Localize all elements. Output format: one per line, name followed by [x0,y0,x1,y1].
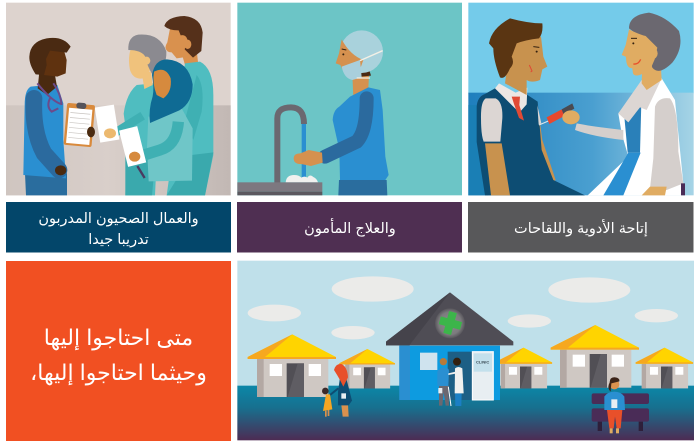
figure: woman on bench [592,377,649,433]
panel: village clinic scene [237,261,694,440]
figure: doctor with syringe [575,13,685,195]
icon: doctor hand [562,110,580,124]
icon: soap foam [286,175,318,182]
panel: safe treatment illustration [237,3,462,195]
panel: orange message [6,261,231,441]
icon: clipboard [64,102,95,147]
panel: trained health workers illustration [6,3,231,195]
caption: safe treatment: والعلاج المأمون [304,218,396,238]
caption: medicines and vaccines [468,202,694,252]
clouds [248,276,678,339]
house: large right [551,325,639,388]
figure: woman with hijab [119,59,193,181]
panel: orange message: متى احتاجوا إليها [44,325,193,351]
house: small right of clinic [495,348,552,388]
panel: orange message: وحيثما احتاجوا إليها، [30,360,207,386]
house: far right [636,348,693,388]
figure: nurse washing hands [294,30,389,195]
figure: older woman [95,35,166,195]
icon: faucet and water [277,107,306,183]
figure: health worker [23,38,71,195]
icon: syringe [539,103,574,125]
house: large left [248,334,336,397]
figure: patient [477,18,585,195]
caption: trained health workers: والعمال الصحيون المدربون [38,211,199,227]
clinic building [386,292,513,400]
icon: sink [237,182,322,195]
figure: man in teal [164,16,213,195]
caption: trained health workers: تدريبا جيدا [88,232,149,248]
caption: safe treatment [237,202,462,252]
panel: vaccines illustration [468,3,694,195]
caption: trained health workers [6,202,231,252]
clinic sign: CLINIC [476,360,489,365]
figures at clinic door [437,358,464,406]
house: small left [339,349,395,388]
caption: medicines and vaccines: إتاحة الأدوية واللقاحات [514,219,648,237]
figure: woman with child [322,364,352,417]
